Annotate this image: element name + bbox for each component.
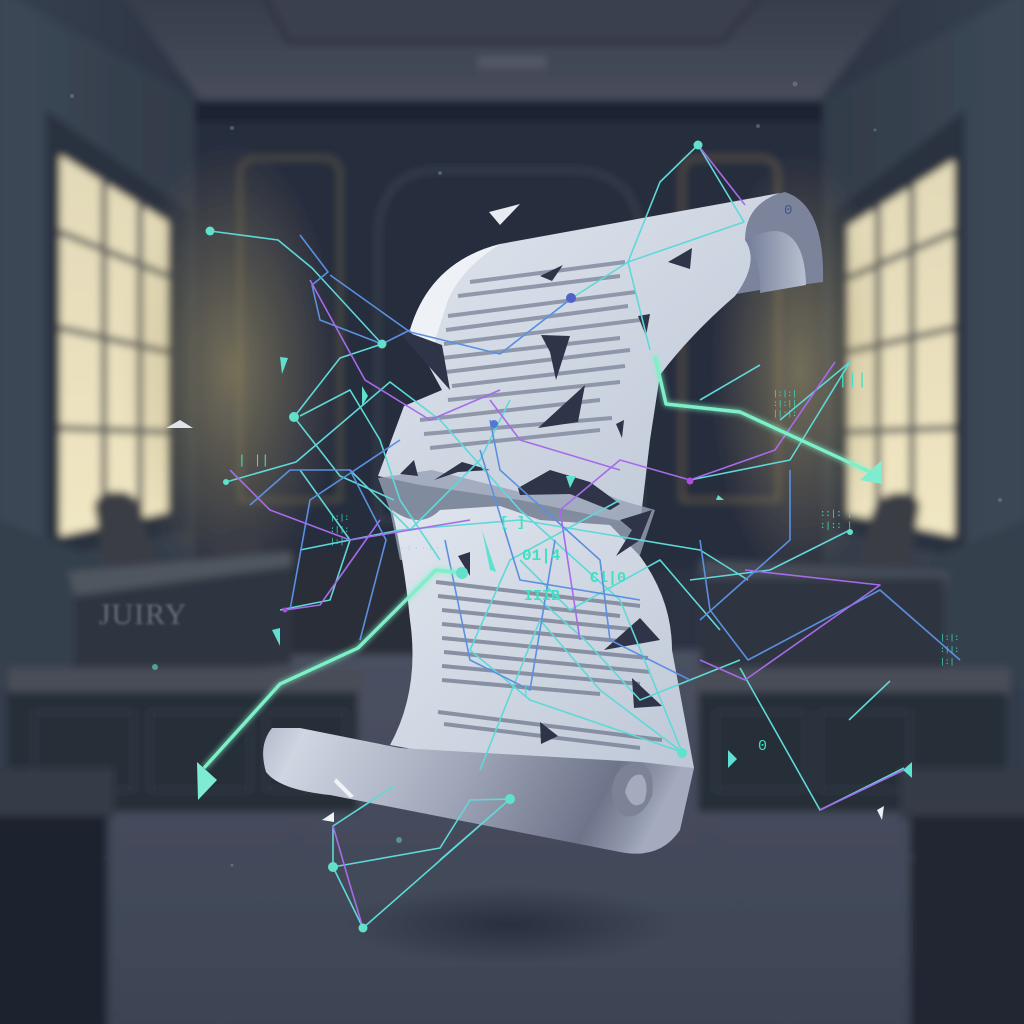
- dust particles: [70, 82, 1002, 866]
- upper sheet: [378, 193, 780, 525]
- data glyph clusters: :||:: [940, 646, 959, 655]
- torn band between the sheets: [378, 470, 655, 560]
- blue lines: [250, 235, 960, 690]
- data glyph clusters: |:|: [330, 538, 344, 547]
- data glyph clusters: |||: [838, 371, 867, 389]
- floor lines: [105, 820, 915, 1024]
- back wall: [195, 100, 823, 570]
- data glyph clusters: [ ]: [500, 515, 525, 531]
- left curled edge: [410, 244, 500, 350]
- roll end spiral: [612, 762, 653, 816]
- cyan lines: [210, 145, 904, 928]
- right side wall: [822, 0, 1024, 640]
- nodes: [152, 140, 853, 932]
- data glyph clusters: Cl|0: [590, 570, 626, 587]
- data glyph clusters: IIIB: [524, 588, 560, 605]
- tear shards: [396, 248, 692, 744]
- lower sheet: [390, 506, 694, 790]
- foreground pillars: [0, 768, 114, 820]
- floor shadow: [345, 885, 675, 965]
- scroll: [166, 192, 884, 854]
- data glyph clusters: 0: [784, 203, 792, 219]
- small teal shards: [272, 357, 912, 778]
- jury label: JUIRY: [99, 598, 187, 631]
- data glyph clusters: |:|:: [330, 514, 349, 523]
- data glyph clusters: |:|: [940, 658, 954, 667]
- light spill: [120, 140, 340, 600]
- data glyph clusters: | ||: [238, 453, 269, 468]
- data glyph clusters: ::|: |: [820, 509, 852, 519]
- curl back top right: [690, 192, 823, 300]
- ceiling: [120, 0, 904, 100]
- data glyph clusters: :|:||: [773, 400, 797, 409]
- data glyph clusters: |:|:|: [773, 390, 797, 399]
- data glyph clusters: :||:: [330, 526, 349, 535]
- data glyph clusters: :|:: |: [820, 521, 852, 531]
- data glyph clusters: 01|4: [522, 547, 561, 565]
- floor: [100, 650, 924, 1024]
- upper text lines: [420, 262, 640, 448]
- bright green arrows: [204, 356, 870, 768]
- left side wall: [0, 0, 195, 640]
- bottom roll: [263, 728, 694, 854]
- white shards: [166, 204, 884, 822]
- data glyph clusters: |: [522, 683, 530, 698]
- chairs: [94, 491, 156, 565]
- left window: [46, 110, 190, 560]
- jury box: [68, 552, 300, 598]
- arrowheads: [197, 460, 882, 800]
- data glyph clusters: |:|:: [940, 634, 959, 643]
- network lines: [152, 140, 960, 932]
- data glyph clusters: ||:|:: [773, 410, 797, 419]
- data glyph clusters: [238, 203, 959, 755]
- purple lines: [230, 145, 904, 928]
- accent nodes: [282, 293, 694, 612]
- data glyph clusters: · : · · : · ·: [400, 545, 447, 552]
- right window: [832, 110, 965, 560]
- lower side walls: [0, 520, 100, 690]
- lower text lines: [436, 582, 662, 748]
- data glyph clusters: 0: [758, 738, 767, 755]
- front benches: [8, 668, 364, 696]
- back wall panels: [240, 158, 778, 520]
